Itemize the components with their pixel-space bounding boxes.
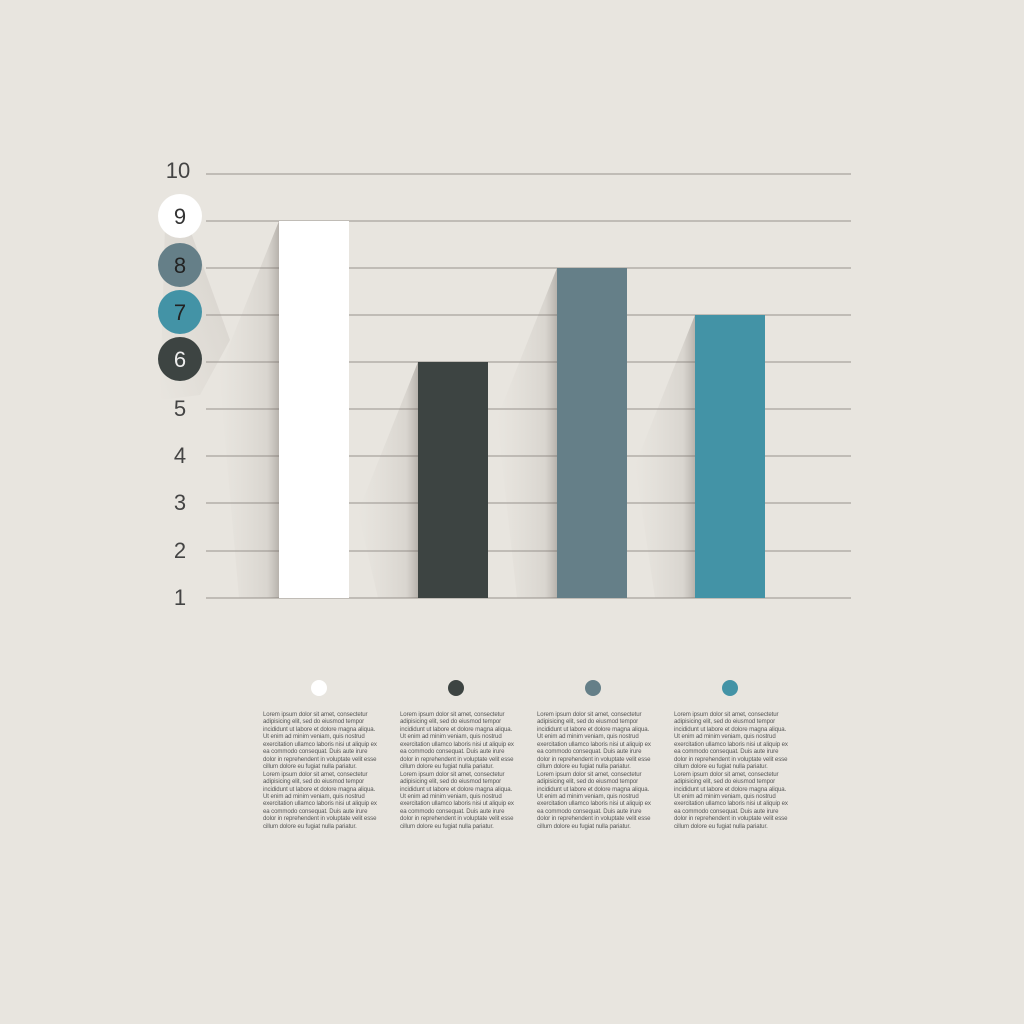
bar: teal 7 — [635, 315, 765, 598]
y axis labels — [166, 158, 190, 610]
y axis labels: 2 — [174, 538, 186, 563]
bar: white 9 — [219, 221, 349, 598]
text block 4 — [674, 711, 788, 830]
y axis labels: 4 — [174, 443, 186, 468]
legend circles on axis: 6 — [174, 347, 186, 372]
bar: gray 8 — [497, 268, 627, 598]
y axis labels: 10 — [166, 158, 190, 183]
text block 1: Lorem ipsum dolor sit amet, consectetur adipisicing elit, sed do eiusmod tempor incididunt ut labore et dolore magna aliqua. Ut enim ad minim veniam, quis nostrud exercitation ullamco laboris nisi ut aliquip ex ea commodo consequat. Duis aute irure dolor in reprehendent in voluptate velit esse cillum dolore eu fugiat nulla pariatur. — [263, 711, 377, 770]
y axis labels: 3 — [174, 490, 186, 515]
legend circles on axis: 7 — [174, 300, 186, 325]
legend dots — [311, 680, 738, 696]
text block 3 — [537, 711, 651, 830]
text block 1: Lorem ipsum dolor sit amet, consectetur adipisicing elit, sed do eiusmod tempor incididunt ut labore et dolore magna aliqua. Ut enim ad minim veniam, quis nostrud exercitation ullamco laboris nisi ut aliquip ex ea commodo consequat. Duis aute irure dolor in reprehendent in voluptate velit esse cillum dolore eu fugiat nulla pariatur. — [263, 771, 377, 830]
text block 4: Lorem ipsum dolor sit amet, consectetur adipisicing elit, sed do eiusmod tempor incididunt ut labore et dolore magna aliqua. Ut enim ad minim veniam, quis nostrud exercitation ullamco laboris nisi ut aliquip ex ea commodo consequat. Duis aute irure dolor in reprehendent in voluptate velit esse cillum dolore eu fugiat nulla pariatur. — [674, 771, 788, 830]
text block 2: Lorem ipsum dolor sit amet, consectetur adipisicing elit, sed do eiusmod tempor incididunt ut labore et dolore magna aliqua. Ut enim ad minim veniam, quis nostrud exercitation ullamco laboris nisi ut aliquip ex ea commodo consequat. Duis aute irure dolor in reprehendent in voluptate velit esse cillum dolore eu fugiat nulla pariatur. — [400, 711, 514, 770]
legend circles on axis — [158, 194, 230, 400]
text block 2 — [400, 711, 514, 830]
text block 2: Lorem ipsum dolor sit amet, consectetur adipisicing elit, sed do eiusmod tempor incididunt ut labore et dolore magna aliqua. Ut enim ad minim veniam, quis nostrud exercitation ullamco laboris nisi ut aliquip ex ea commodo consequat. Duis aute irure dolor in reprehendent in voluptate velit esse cillum dolore eu fugiat nulla pariatur. — [400, 771, 514, 830]
y axis labels: 5 — [174, 396, 186, 421]
text block 3: Lorem ipsum dolor sit amet, consectetur adipisicing elit, sed do eiusmod tempor incididunt ut labore et dolore magna aliqua. Ut enim ad minim veniam, quis nostrud exercitation ullamco laboris nisi ut aliquip ex ea commodo consequat. Duis aute irure dolor in reprehendent in voluptate velit esse cillum dolore eu fugiat nulla pariatur. — [537, 711, 651, 770]
text block 3: Lorem ipsum dolor sit amet, consectetur adipisicing elit, sed do eiusmod tempor incididunt ut labore et dolore magna aliqua. Ut enim ad minim veniam, quis nostrud exercitation ullamco laboris nisi ut aliquip ex ea commodo consequat. Duis aute irure dolor in reprehendent in voluptate velit esse cillum dolore eu fugiat nulla pariatur. — [537, 771, 651, 830]
text block 1 — [263, 711, 377, 830]
y axis labels: 1 — [174, 585, 186, 610]
text block 4: Lorem ipsum dolor sit amet, consectetur adipisicing elit, sed do eiusmod tempor incididunt ut labore et dolore magna aliqua. Ut enim ad minim veniam, quis nostrud exercitation ullamco laboris nisi ut aliquip ex ea commodo consequat. Duis aute irure dolor in reprehendent in voluptate velit esse cillum dolore eu fugiat nulla pariatur. — [674, 711, 788, 770]
bar: dark 6 — [358, 362, 488, 598]
legend circles on axis: 8 — [174, 253, 186, 278]
legend circles on axis: 9 — [174, 204, 186, 229]
